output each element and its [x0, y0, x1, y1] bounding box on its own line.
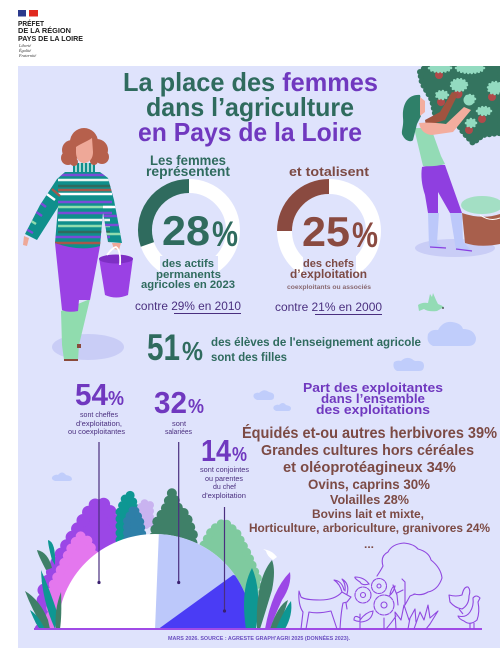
illustration: woman with bucket [20, 128, 133, 361]
hair [402, 95, 421, 141]
text: des chefs d'exploitation [287, 258, 371, 291]
illustration: foreground leaves left [25, 540, 61, 629]
list: filières: Bovins lait et mixte, [312, 507, 424, 521]
icon: cloud heading left [253, 390, 274, 400]
logo: préfet de la région: Liberté [18, 43, 32, 48]
list: filières: Ovins, caprins 30% [308, 476, 431, 492]
text: des chefs d'exploitation: d’exploitation [290, 269, 367, 281]
leaves [429, 63, 500, 127]
green tree [152, 493, 193, 550]
pink tree [50, 536, 96, 640]
logo: préfet de la région: PAYS DE LA LOIRE [18, 36, 83, 43]
dome chart [60, 534, 246, 628]
arm [419, 107, 471, 135]
face [76, 138, 93, 163]
text: élèves de l'enseignement agricole: sont des filles [211, 350, 287, 364]
stat: 14%: du chef [213, 484, 236, 491]
text: et totalisent: et totalisent [289, 164, 370, 179]
text: élèves de l'enseignement agricole: des élèves de l'enseignement agricole [211, 335, 421, 349]
stat: 54% [68, 377, 126, 436]
list: filières: Grandes cultures hors céréales [261, 442, 474, 459]
illustration: foreground leaves right [244, 560, 291, 629]
illustration: woman picking fruit [402, 63, 500, 257]
basket [461, 196, 500, 214]
stat: 14%: % [232, 444, 247, 466]
heading: part des exploitantes: dans l’ensemble [321, 391, 425, 406]
icon: cloud large [428, 322, 476, 346]
purple tree [40, 502, 124, 640]
text: élèves de l'enseignement agricole [211, 335, 421, 364]
logo: préfet de la région: Égalité [18, 48, 32, 53]
text: contre 29% en 2010: contre 29% en 2010 [135, 301, 241, 313]
text: des actifs permanents [141, 258, 235, 291]
logo: préfet de la région: PRÉFET [18, 19, 45, 28]
illustration: line art poultry [449, 587, 480, 629]
pants [421, 165, 462, 213]
list: filières [242, 425, 497, 551]
text: des actifs permanents: permanents [156, 269, 221, 281]
illustration: trees and dome [40, 493, 262, 640]
leaders [97, 442, 226, 613]
stat: 51%: 51 [147, 327, 180, 368]
boots [428, 213, 443, 247]
text: des chefs d'exploitation: coexploitants ou associés [287, 284, 371, 291]
text: des chefs d'exploitation: des chefs [303, 258, 354, 270]
chart: donut 25% [284, 186, 378, 292]
stat: 14%: ou parentes [205, 476, 244, 483]
stat: 51%: % [182, 336, 203, 366]
stat: 32%: sont [172, 421, 186, 428]
list: filières: et oléoprotéagineux 34% [283, 459, 456, 476]
logo: préfet de la région [18, 10, 83, 58]
illustration: line art tree and grass [377, 543, 442, 629]
sweater [25, 172, 122, 248]
title: La place des femmes [123, 67, 378, 97]
teal tree [120, 495, 138, 540]
chart: donut 25%: % [352, 216, 378, 255]
blue tree [127, 508, 144, 545]
icon: cloud small [393, 358, 424, 371]
pants [55, 243, 100, 312]
stat: 14% [200, 433, 250, 500]
title: dans l’agriculture [146, 92, 354, 122]
stat: 32%: % [188, 396, 204, 418]
heading: part des exploitantes: des exploitations [316, 402, 430, 417]
stat: 54%: % [108, 388, 124, 410]
hands [23, 236, 29, 246]
chart: donut 28%: 28 [162, 207, 210, 254]
list: filières: Horticulture, arboriculture, granivores 24% [249, 521, 490, 535]
chart: donut 28% [145, 186, 238, 286]
text: les femmes représentent: Les femmes [150, 153, 226, 168]
stat: 32% [154, 385, 204, 436]
stat: 54%: sont cheffes [80, 412, 118, 419]
title: en Pays de la Loire [138, 117, 362, 147]
stat: 32%: salariées [165, 429, 192, 436]
hatched mint tree [204, 522, 258, 605]
stat: 14%: 14 [201, 433, 232, 468]
icon: cloud lower left [52, 472, 72, 481]
heading: part des exploitantes: Part des exploitantes [303, 380, 443, 395]
list: filières: ... [364, 539, 374, 551]
fruits [435, 71, 496, 134]
stat: 14%: d'exploitation [202, 493, 246, 500]
stat: 54%: d'exploitation, [76, 421, 122, 428]
bucket [99, 256, 133, 298]
text: les femmes représentent: représentent [146, 164, 231, 179]
text: des actifs permanents: des actifs [162, 258, 214, 270]
branch [425, 92, 458, 126]
face [420, 97, 425, 116]
footer: source: MARS 2026. SOURCE : AGRESTE GRAPH’AGRI 2025 (DONNÉES 2023). [168, 634, 350, 642]
illustration: line art goat [299, 579, 351, 629]
chart: donut 28%: % [212, 215, 238, 254]
torso [414, 128, 445, 166]
heading: part des exploitantes [303, 380, 443, 417]
illustration: line art flowers [354, 577, 395, 629]
text: les femmes représentent [146, 153, 231, 179]
stat: 54%: 54 [75, 377, 109, 412]
text: des actifs permanents: agricoles en 2023 [141, 279, 235, 291]
tree foliage [420, 66, 500, 143]
icon: green bird [418, 293, 444, 311]
boots [61, 299, 90, 360]
stat: 14%: sont conjointes [200, 467, 250, 474]
hair [61, 128, 109, 166]
chart: donut 25%: 25 [302, 208, 350, 255]
icon: cloud heading right [273, 403, 291, 411]
text: contre 21% en 2000: contre 21% en 2000 [275, 302, 382, 314]
icon: white bird [263, 549, 277, 560]
stat: 32%: 32 [154, 385, 187, 420]
ground line [34, 628, 482, 630]
title [123, 67, 378, 147]
list: filières: Volailles 28% [330, 492, 409, 507]
stat: 54%: ou coexploitantes [68, 429, 126, 436]
lilac tree [141, 503, 150, 525]
logo: préfet de la région: Fraternité [18, 53, 37, 58]
logo: préfet de la région: DE LA RÉGION [18, 26, 71, 35]
